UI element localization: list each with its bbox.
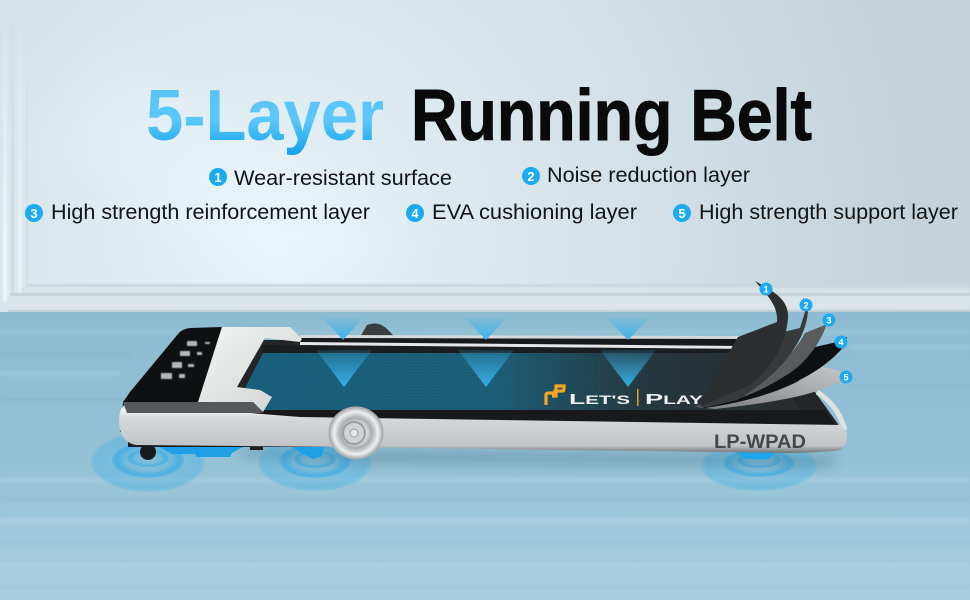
layer 3: [695, 322, 827, 408]
layer list: [25, 164, 958, 224]
title: 5-Layer: [146, 76, 384, 156]
item 2: 2: [527, 169, 535, 184]
layer number badges: 3: [826, 316, 832, 326]
brand logo: [546, 386, 704, 408]
down arrows: [316, 318, 656, 387]
console: lower lip: [123, 402, 263, 413]
front rail: [250, 410, 835, 424]
floor ripple: right: [701, 441, 817, 491]
rear rail: [262, 324, 742, 353]
layer 2: [700, 297, 808, 407]
title: Running Belt: [411, 76, 812, 156]
console: readouts: [161, 341, 210, 379]
wooden floor: [0, 312, 970, 600]
treadmill: [119, 281, 852, 466]
brand logo: L ET'S: [569, 391, 631, 408]
belt layers fan: [695, 281, 847, 409]
skirting board: [8, 284, 970, 312]
rear feet: [128, 442, 776, 460]
model label: LP-WPAD: [714, 432, 806, 453]
layer number badges: 1: [763, 284, 769, 294]
item 3: 3: [30, 206, 38, 221]
brand logo: P LAY: [645, 391, 704, 408]
item 5: 5: [678, 206, 686, 221]
layer 1: [700, 281, 788, 407]
item 1: 1: [214, 170, 222, 185]
layer number badges: 5: [843, 372, 849, 382]
floor ripple: middle: [258, 433, 372, 491]
silver frame: [119, 404, 847, 453]
corner rim: [817, 392, 845, 430]
layer number badges: [760, 282, 852, 384]
layer number badges: 2: [803, 300, 809, 310]
console: display: [123, 327, 222, 402]
belt mesh texture: [245, 353, 800, 410]
running belt: [245, 353, 800, 410]
layer 4: [700, 337, 847, 408]
deck back plate: [120, 340, 838, 432]
layer number badges: 4: [838, 338, 844, 348]
title: [146, 76, 812, 156]
floor shadow: [240, 450, 840, 466]
console: white panel: [198, 327, 302, 412]
item 3: High strength reinforcement layer: [51, 201, 370, 224]
item 4: 4: [411, 206, 419, 221]
wall background: [0, 0, 970, 312]
item 5: High strength support layer: [699, 201, 958, 224]
floor ripple: left: [91, 432, 205, 492]
item 2: Noise reduction layer: [547, 164, 750, 187]
layer 5: [705, 366, 845, 409]
item 4: EVA cushioning layer: [432, 201, 637, 224]
item 1: Wear-resistant surface: [234, 167, 452, 190]
wall pilaster: [2, 92, 28, 302]
roller knob: [329, 407, 383, 459]
